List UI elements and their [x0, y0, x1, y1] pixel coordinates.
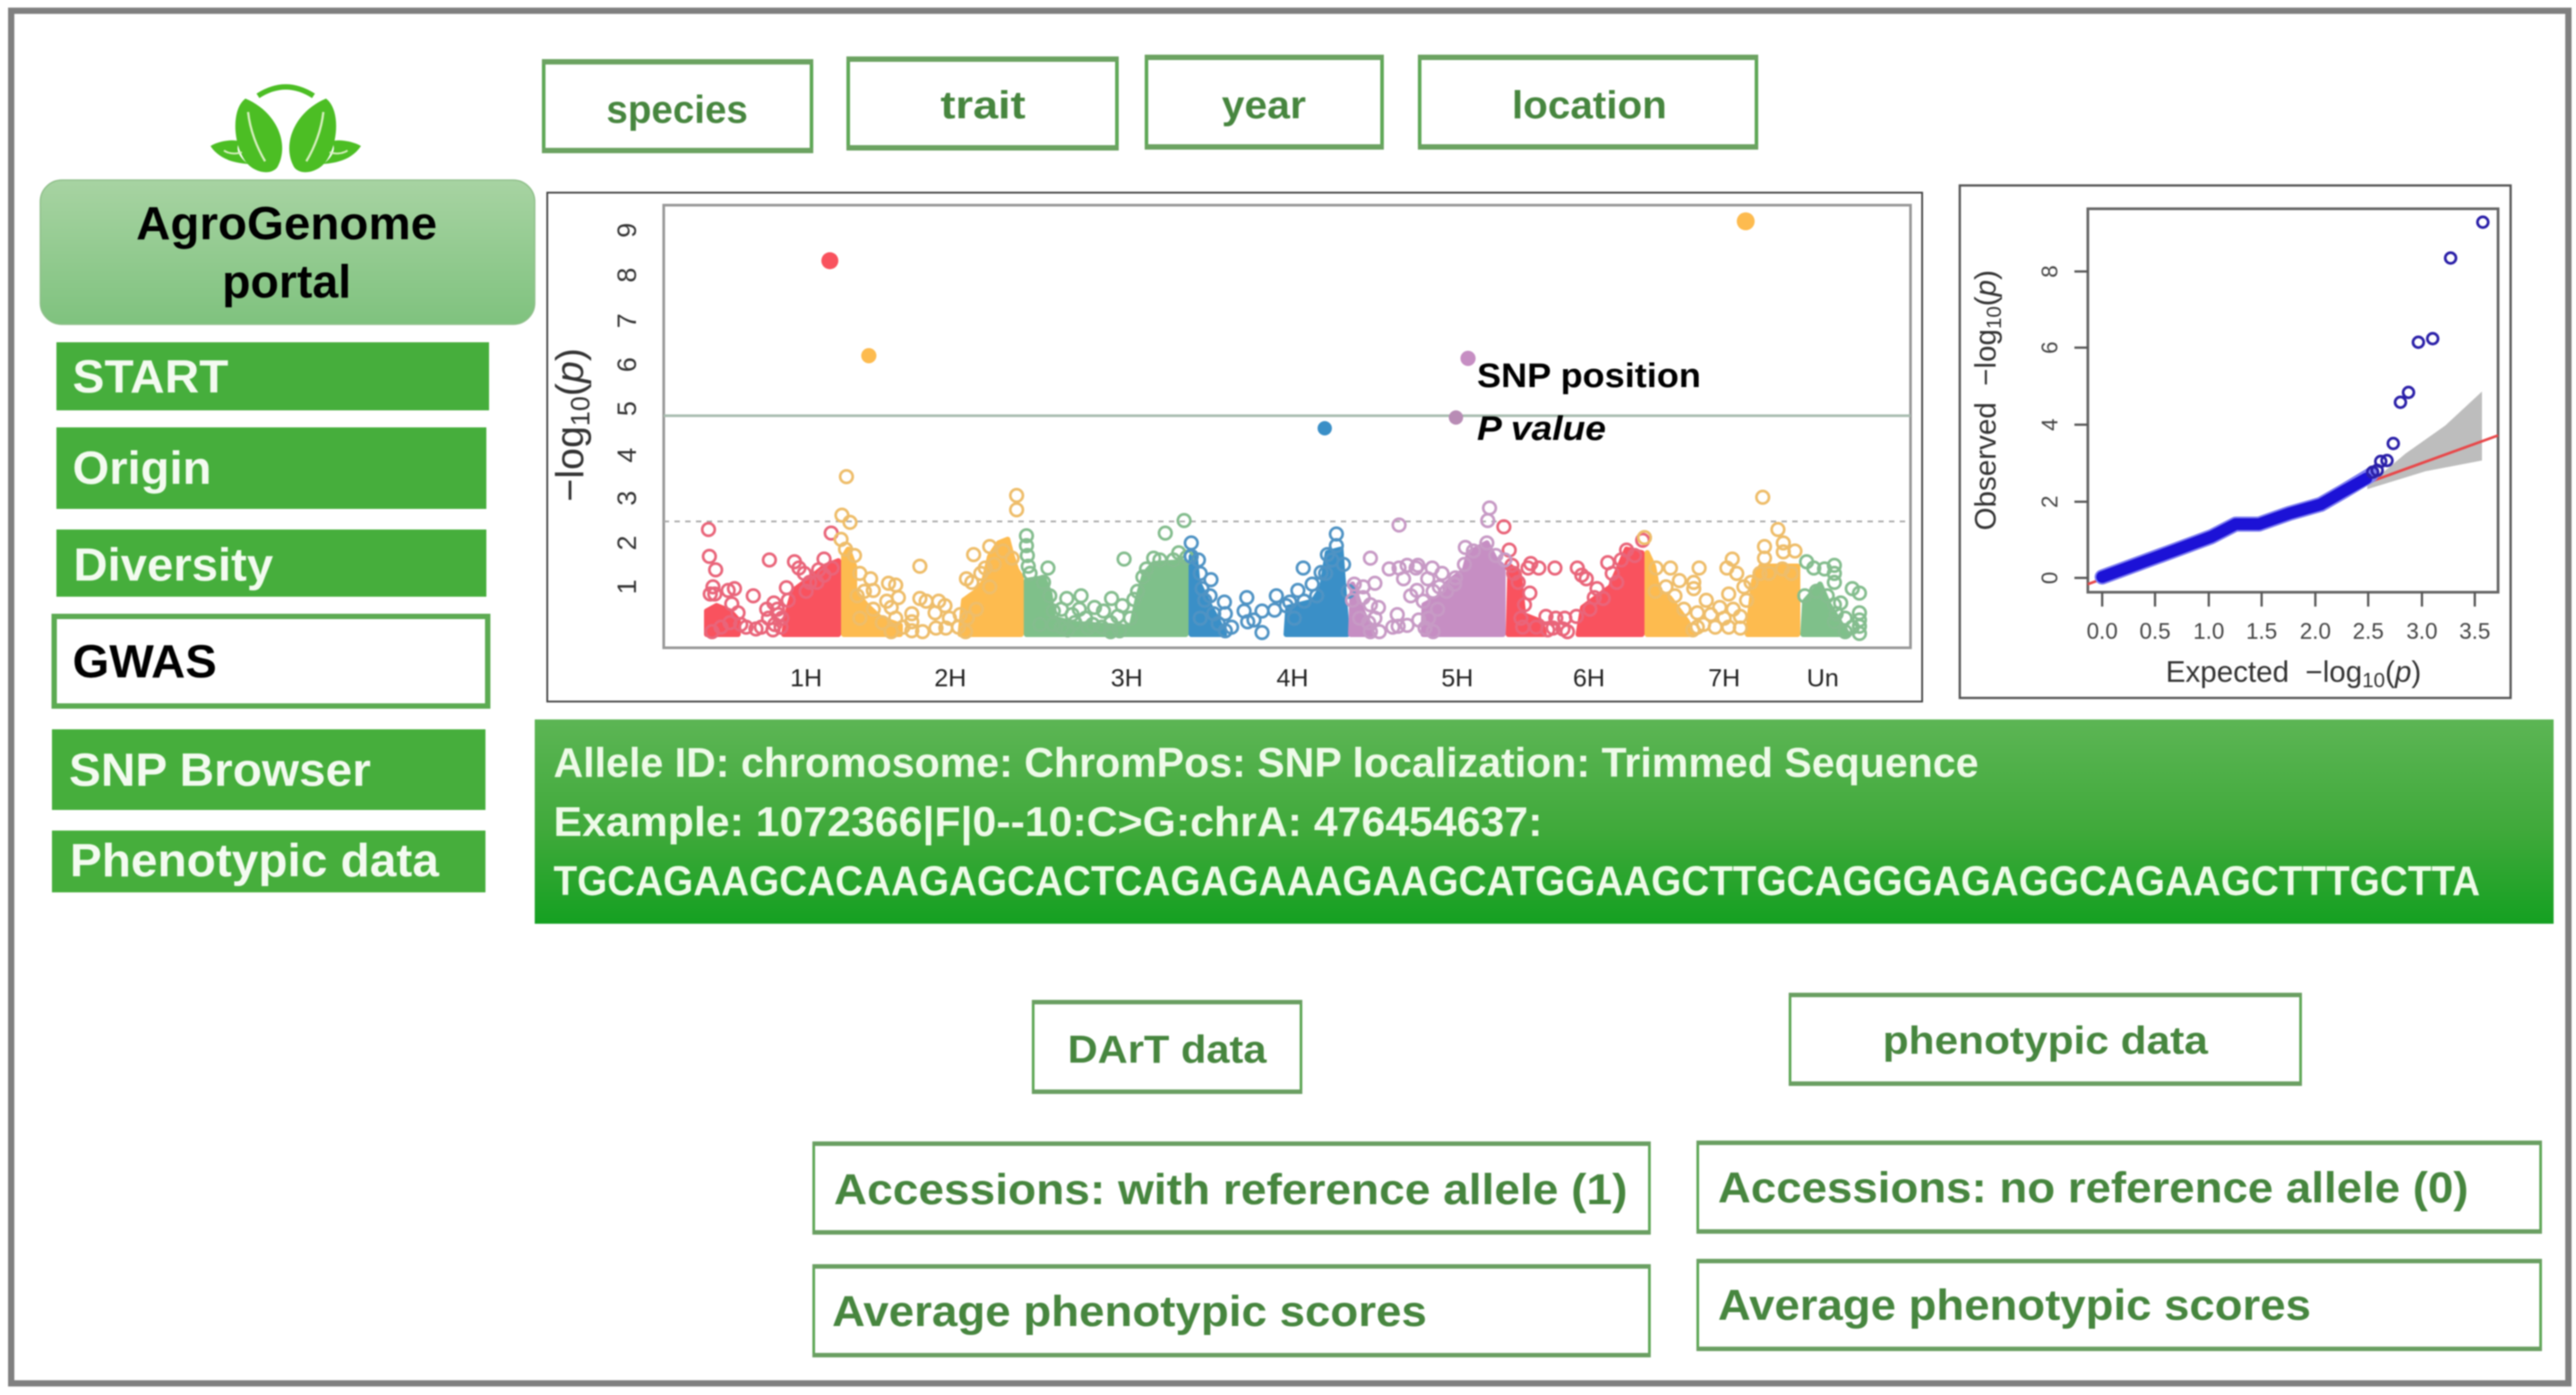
- QQ x tick labels: 1.0: [2194, 619, 2224, 644]
- nav item: GWAS (active): GWAS: [73, 636, 217, 688]
- y axis tick labels: 7: [613, 314, 642, 328]
- nav item: START: [56, 342, 489, 410]
- chromosome labels: 7H: [1708, 664, 1740, 692]
- nav item: SNP Browser: SNP Browser: [69, 745, 371, 797]
- nav item: Diversity: Diversity: [73, 539, 273, 591]
- box: accessions no reference allele: [1696, 1141, 2542, 1234]
- QQ axis ticks: [2074, 271, 2475, 607]
- box: average phenotypic scores right: [1696, 1259, 2542, 1351]
- box: phenotypic data: [1789, 993, 2302, 1086]
- box: phenotypic data: phenotypic data: [1883, 1019, 2209, 1063]
- y axis tick labels: 2: [613, 536, 642, 550]
- box: average phenotypic scores right: Average phenotypic scores: [1718, 1282, 2311, 1330]
- expected line: [2088, 435, 2498, 584]
- confidence band: [2367, 392, 2482, 489]
- title: AgroGenome portal: [40, 180, 535, 324]
- chromosome labels: 2H: [934, 664, 966, 692]
- QQ x axis title: (: [2385, 655, 2395, 688]
- chip: species: species: [606, 88, 748, 132]
- nav item: Phenotypic data: [52, 831, 485, 892]
- chromosome labels: 3H: [1111, 664, 1143, 692]
- chip: trait: trait: [940, 83, 1026, 127]
- y axis tick labels: [613, 223, 642, 594]
- open markers: blue chromosome: [1185, 528, 1354, 639]
- chip: species: [542, 59, 813, 153]
- y axis title: 10: [566, 396, 596, 426]
- chromosome labels: Un: [1807, 664, 1839, 692]
- open markers: red chromosomes: [702, 521, 1649, 638]
- observed points band: [2102, 475, 2371, 577]
- box: accessions with reference allele: Accessions: with reference allele (1): [834, 1167, 1627, 1214]
- box: DArT data: DArT data: [1068, 1028, 1267, 1072]
- box: average phenotypic scores left: [812, 1264, 1651, 1357]
- panel: Manhattan plot: [547, 193, 1922, 702]
- significant SNP markers: [821, 212, 1755, 435]
- filter chips row: [542, 55, 1758, 153]
- y axis tick labels: 3: [613, 491, 642, 505]
- chromosome labels: 5H: [1441, 664, 1473, 692]
- chromosome labels: [790, 664, 1839, 692]
- QQ x tick labels: 3.5: [2460, 619, 2490, 644]
- dense marker regions: [707, 539, 1848, 634]
- open markers: green chromosomes: [1020, 514, 1866, 640]
- QQ y axis title: 10: [1982, 306, 2005, 329]
- QQ y axis title: Observed −log: [1969, 329, 2002, 530]
- panel: QQ plot: [1960, 185, 2511, 698]
- QQ y axis title: (: [1969, 297, 2002, 306]
- chip: location: [1418, 55, 1758, 150]
- y axis tick labels: 5: [613, 401, 642, 416]
- QQ x tick labels: 2.5: [2353, 619, 2383, 644]
- chip: trait: [846, 56, 1119, 151]
- title: AgroGenome portal: AgroGenome: [136, 198, 437, 250]
- box: accessions with reference allele: [812, 1141, 1651, 1235]
- nav item: Phenotypic data: Phenotypic data: [70, 835, 440, 887]
- QQ y tick labels: 4: [2038, 418, 2063, 431]
- chip: year: year: [1222, 83, 1306, 127]
- nav item: Origin: Origin: [73, 443, 211, 495]
- banner: allele ID format: [535, 719, 2554, 924]
- y axis tick labels: 6: [613, 357, 642, 372]
- banner line 2: Example: 1072366|F|0--10:C>G:chrA: 476454637:: [554, 798, 1542, 845]
- nav item: Diversity: [56, 530, 486, 597]
- observed outlier points: [2367, 217, 2488, 478]
- QQ y axis title: p): [1969, 270, 2002, 297]
- QQ x axis title: 10: [2362, 668, 2385, 692]
- QQ y tick labels: 0: [2038, 572, 2063, 584]
- box: average phenotypic scores left: Average phenotypic scores: [832, 1288, 1427, 1336]
- annotation: P value: P value: [1477, 410, 1606, 448]
- y axis title: p): [548, 348, 592, 383]
- annotation: SNP position: SNP position: [1477, 357, 1701, 395]
- y axis tick labels: 9: [613, 223, 642, 237]
- y axis tick labels: 1: [613, 580, 642, 594]
- chromosome labels: 1H: [790, 664, 822, 692]
- open markers: purple chromosome: [1346, 502, 1511, 638]
- QQ x tick labels: 0.5: [2140, 619, 2170, 644]
- banner line 3: TGCAGAAGCACAAGAGCACTCAGAGAAAGAAGCATGGAAGCTTGCAGGGAGAGGCAGAAGCTTTGCTTA: [554, 857, 2480, 904]
- QQ x axis title: Expected −log: [2166, 655, 2362, 688]
- chromosome labels: 4H: [1276, 664, 1309, 692]
- QQ x axis title: p): [2395, 655, 2421, 688]
- chip: location: location: [1512, 83, 1667, 127]
- chromosome labels: 6H: [1573, 664, 1605, 692]
- nav item: Origin: [56, 427, 486, 509]
- open markers: orange chromosomes: [835, 470, 1801, 638]
- box: accessions no reference allele: Accessions: no reference allele (0): [1718, 1165, 2469, 1212]
- icon: AgroGenome leaf logo: [210, 87, 361, 172]
- navigation menu: [52, 342, 489, 892]
- QQ y tick labels: 2: [2038, 495, 2063, 508]
- QQ x tick labels: 1.5: [2246, 619, 2277, 644]
- title: AgroGenome portal: portal: [222, 256, 351, 308]
- box: DArT data: [1032, 1000, 1302, 1094]
- QQ x tick labels: 3.0: [2407, 619, 2437, 644]
- QQ y tick labels: 6: [2038, 341, 2063, 354]
- QQ x tick labels: 2.0: [2300, 619, 2331, 644]
- y axis title: −log: [548, 426, 592, 502]
- nav item: SNP Browser: [52, 729, 485, 810]
- y axis tick labels: 4: [613, 448, 642, 462]
- significance lines: [664, 416, 1911, 521]
- QQ x tick labels: 0.0: [2087, 619, 2117, 644]
- QQ y tick labels: 8: [2038, 265, 2063, 278]
- QQ x tick labels: [2087, 619, 2490, 644]
- y axis title: (: [548, 383, 592, 396]
- QQ y tick labels: [2038, 265, 2063, 584]
- nav item: GWAS (active): [54, 616, 487, 706]
- y axis tick labels: 8: [613, 268, 642, 282]
- nav item: START: START: [73, 351, 228, 403]
- chip: year: [1145, 55, 1384, 150]
- banner line 1: Allele ID: chromosome: ChromPos: SNP localization: Trimmed Sequence: [554, 739, 1979, 786]
